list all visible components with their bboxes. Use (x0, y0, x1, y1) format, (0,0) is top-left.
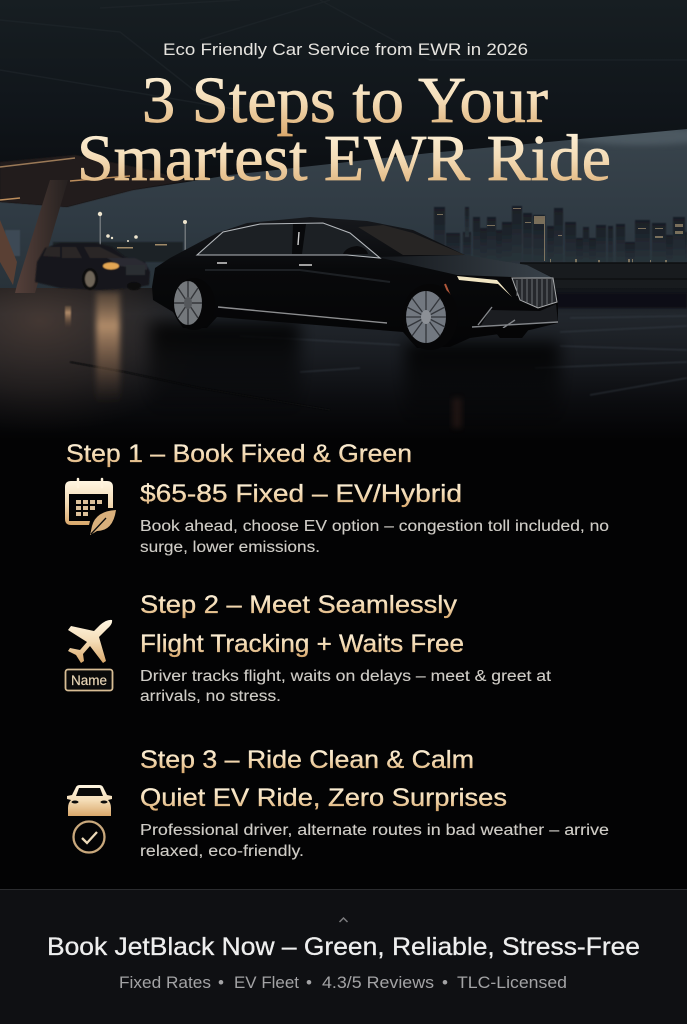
amber marker (445, 284, 450, 296)
grille (512, 278, 557, 308)
front wheel (402, 284, 458, 350)
limousine side glass (197, 223, 380, 258)
footer trust line: • (442, 973, 448, 992)
step 2 heading: Step 2 – Meet Seamlessly (140, 591, 458, 619)
limousine pillar highlight (298, 232, 299, 245)
dark zone under wall (520, 293, 687, 308)
small reflection (65, 306, 71, 328)
footer call to action (0, 889, 687, 1024)
street lamps and terminal lights (98, 212, 187, 250)
pillar strut (0, 220, 17, 285)
step 3 description: relaxed, eco-friendly. (140, 843, 304, 860)
main title line 2: Smartest EWR Ride (77, 122, 611, 195)
icon: check circle (74, 822, 104, 852)
footer trust line (119, 973, 567, 992)
step 1 description: Book ahead, choose EV option – congestion toll included, no (140, 518, 609, 535)
icon: name sign: Name (71, 673, 107, 688)
footer trust line: • (218, 973, 224, 992)
step 3 feature heading: Quiet EV Ride, Zero Surprises (140, 784, 507, 812)
rear wheel (173, 278, 215, 330)
headlight (457, 276, 512, 297)
footer top border (0, 889, 687, 890)
step 2 (66, 591, 552, 705)
limousine (152, 217, 558, 350)
step 1 description: surge, lower emissions. (140, 539, 320, 556)
limousine door handles (217, 263, 312, 265)
step 1 description (140, 518, 609, 556)
clouds (570, 127, 687, 145)
front car reflection (405, 342, 560, 434)
distant tower (5, 230, 20, 256)
wall stripes (520, 263, 687, 279)
canopy light strip (0, 158, 75, 167)
far front wheel (492, 328, 530, 338)
sky (0, 120, 687, 290)
step 1 (65, 440, 609, 556)
footer trust line: EV Fleet (234, 973, 299, 992)
light reflection on ground (96, 292, 120, 404)
ceiling canopy (0, 0, 687, 207)
footer headline: Book JetBlack Now – Green, Reliable, Stress-Free (47, 933, 640, 961)
step 3 description: Professional driver, alternate routes in bad weather – arrive (140, 822, 609, 839)
step 2 feature heading: Flight Tracking + Waits Free (140, 630, 464, 658)
step 1 price heading: $65-85 Fixed – EV/Hybrid (140, 480, 462, 508)
parked car (35, 243, 150, 290)
step 1 heading: Step 1 – Book Fixed & Green (66, 440, 412, 468)
city window lights (437, 208, 683, 263)
icon: car (67, 785, 112, 816)
limousine sill trim (218, 307, 387, 323)
footer trust line: TLC-Licensed (457, 973, 567, 992)
step 3 heading: Step 3 – Ride Clean & Calm (140, 746, 474, 774)
limousine mirror (343, 246, 368, 254)
left canopy with lights (0, 155, 187, 207)
footer trust line: • (306, 973, 312, 992)
hero photo: limousine at night (0, 0, 687, 440)
lower bumper (480, 304, 558, 327)
ground (0, 288, 687, 440)
rear car reflection (150, 322, 300, 422)
ceiling beams (0, 0, 687, 110)
icon: calendar with leaf (65, 479, 116, 535)
footer panel (0, 889, 687, 1024)
city skyline (434, 206, 687, 265)
title block (77, 40, 611, 195)
warm left ground glow (0, 288, 260, 438)
icon: airplane (68, 620, 112, 663)
wet ground reflection lines (240, 316, 687, 395)
eyebrow subtitle: Eco Friendly Car Service from EWR in 2026 (163, 40, 528, 59)
harbor wall (520, 263, 687, 293)
step 3 (67, 746, 609, 860)
canopy edge light (0, 176, 130, 200)
step 2 description (140, 668, 552, 705)
icon: chevron up (340, 918, 348, 922)
footer trust line: 4.3/5 Reviews (322, 973, 434, 992)
distant terminal (53, 242, 183, 262)
main title line 1: 3 Steps to Your (142, 64, 548, 137)
ground crack (70, 362, 330, 410)
limousine side highlight (205, 270, 390, 282)
limousine hood (377, 255, 553, 278)
front bumper trim (472, 307, 558, 328)
limousine b-pillar (292, 224, 306, 254)
step 2 description: arrivals, no stress. (140, 688, 281, 705)
pillar (15, 180, 68, 293)
footer trust line: Fixed Rates (119, 973, 211, 992)
grille slats (517, 279, 552, 307)
step 3 description (140, 822, 609, 860)
faint red reflection (452, 398, 462, 428)
icon: name sign (66, 670, 112, 690)
step 2 description: Driver tracks flight, waits on delays – meet & greet at (140, 668, 552, 685)
limousine windshield (358, 225, 465, 255)
